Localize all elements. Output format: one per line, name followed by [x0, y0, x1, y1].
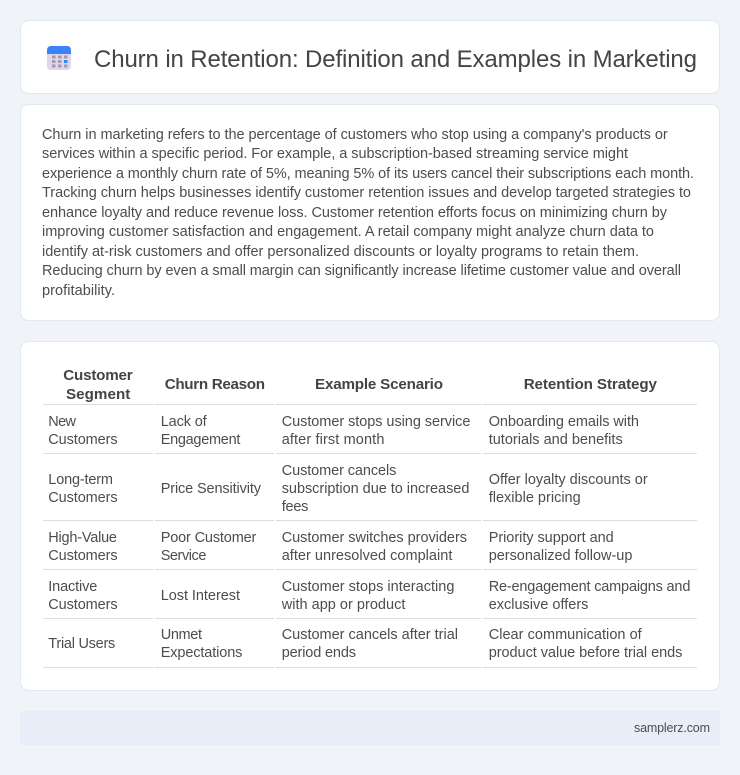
table row: new customers: Customers	[48, 432, 118, 448]
table row: new customers: Engagement	[161, 432, 240, 448]
table row: new customers: tutorials and benefits	[489, 432, 623, 448]
text block: churn explanation: Churn in marketing refers to the percentage of customers who stop using a company's products or	[42, 127, 668, 143]
table row: new customers: after first month	[282, 432, 384, 448]
table row: high-value customers	[48, 530, 632, 564]
table row: inactive customers: with app or product	[281, 597, 405, 613]
table header row: Churn Reason	[165, 376, 265, 393]
table row: high-value customers: Customers	[48, 548, 118, 564]
icon: calendar	[47, 46, 71, 70]
table header row: Segment	[66, 386, 130, 403]
table row: trial users: product value before trial ends	[489, 645, 682, 661]
table row: inactive customers	[48, 579, 690, 613]
table row: long-term customers: Price Sensitivity	[161, 481, 262, 497]
text block: churn explanation: Reducing churn by even a small margin can significantly increase lifetime customer value and overall	[42, 263, 681, 279]
table row: high-value customers: Priority support and	[489, 530, 614, 546]
table row: inactive customers: Inactive	[48, 579, 97, 595]
table row: trial users	[48, 627, 682, 661]
table row: long-term customers: Long-term	[48, 472, 113, 488]
table row: new customers: Onboarding emails with	[489, 414, 639, 430]
table row: long-term customers: Customer cancels	[282, 463, 396, 479]
panel: title header	[20, 20, 720, 94]
table row: trial users: Clear communication of	[489, 627, 643, 643]
text block: churn explanation	[42, 127, 694, 299]
table row: trial users: Unmet	[161, 627, 202, 643]
footer bar	[20, 711, 720, 745]
table row: trial users: period ends	[282, 645, 356, 661]
text block: churn explanation: profitability.	[42, 283, 115, 299]
text block: churn explanation: improving customer satisfaction and engagement. A retail company might analyze churn data to	[42, 224, 654, 240]
table row: high-value customers: personalized follow-up	[489, 548, 632, 564]
panel: definition text	[20, 104, 720, 320]
table row: new customers: Customer stops using service	[282, 414, 470, 430]
table row: trial users: Expectations	[161, 645, 242, 661]
title: Churn in Retention: Definition and Examples in Marketing	[94, 46, 697, 73]
table row: inactive customers: Re-engagement campaigns and	[489, 579, 690, 595]
table header row: Customer	[63, 367, 133, 384]
table row: high-value customers: Poor Customer	[161, 530, 257, 546]
table row: long-term customers: fees	[282, 499, 308, 515]
text block: churn explanation: experience a monthly churn rate of 5%, meaning 5% of its users cancel their subscriptions each month.	[42, 166, 694, 182]
table row: high-value customers: Service	[161, 548, 206, 564]
table row: trial users: Customer cancels after trial	[282, 627, 458, 643]
table row: high-value customers: after unresolved complaint	[282, 548, 452, 564]
table row: trial users: Trial Users	[48, 636, 115, 652]
table row: long-term customers: subscription due to increased	[282, 481, 469, 497]
table row: high-value customers: High-Value	[48, 530, 117, 546]
table header row	[63, 367, 658, 403]
table header row: Retention Strategy	[524, 376, 658, 393]
table row: long-term customers: Offer loyalty discounts or	[489, 472, 648, 488]
table row: inactive customers: Customer stops interacting	[282, 579, 454, 595]
table row: inactive customers: Customers	[48, 597, 118, 613]
text block: churn explanation: enhance loyalty and reduce revenue loss. Customer retention efforts focus on minimizing churn by	[42, 205, 668, 221]
text block: churn explanation: identify at-risk customers and offer personalized discounts or loyalty programs to retain them.	[42, 244, 639, 260]
table row: new customers	[48, 414, 639, 448]
text block: churn explanation: Tracking churn helps businesses identify customer retention issues and develop targeted strategies to	[42, 185, 691, 201]
table row: long-term customers: Customers	[48, 490, 118, 506]
panel: churn table	[20, 342, 720, 690]
table header row: Example Scenario	[315, 376, 443, 393]
table row: high-value customers: Customer switches providers	[282, 530, 467, 546]
table row: new customers: Lack of	[161, 414, 208, 430]
table row: long-term customers	[48, 463, 648, 515]
table row: new customers: New	[48, 414, 77, 430]
footer source text: samplerz.com	[634, 721, 710, 735]
table row: inactive customers: exclusive offers	[489, 597, 588, 613]
table row: inactive customers: Lost Interest	[161, 588, 240, 604]
text block: churn explanation: services within a specific period. For example, a subscription-based streaming service might	[42, 146, 628, 162]
table row: long-term customers: flexible pricing	[489, 490, 581, 506]
